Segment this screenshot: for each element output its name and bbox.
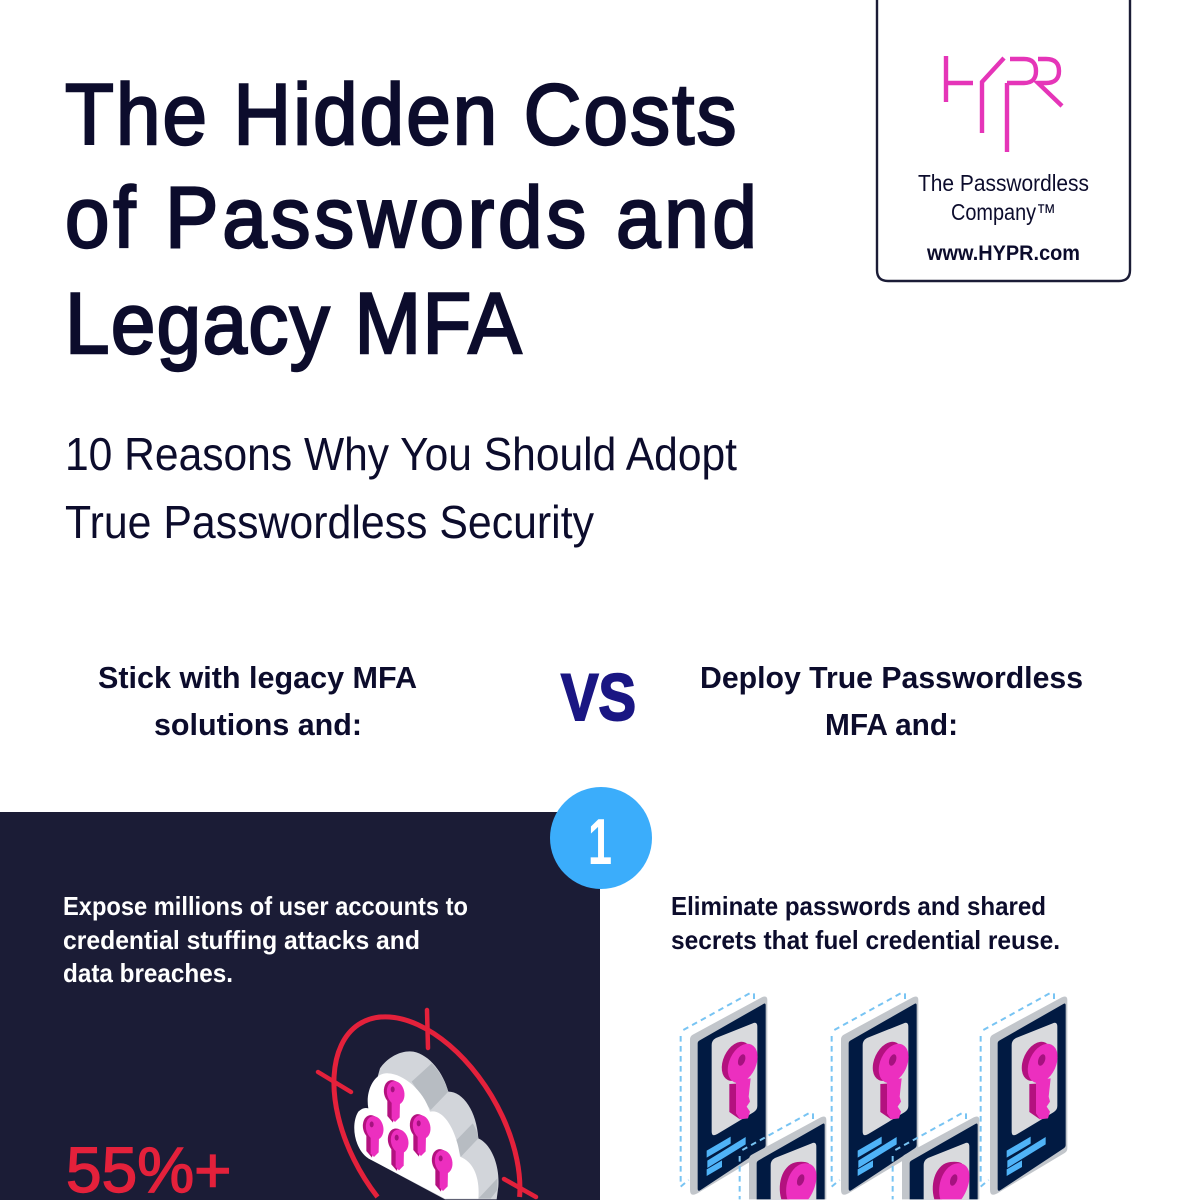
subtitle	[65, 428, 737, 548]
panel text: Expose millions of user accounts to	[63, 891, 468, 921]
panel text	[63, 891, 468, 988]
tagline: The Passwordless	[918, 170, 1089, 196]
panel: legacy dark	[0, 812, 600, 1200]
tagline: Company™	[951, 199, 1056, 225]
heading: passwordless MFA: MFA and:	[825, 707, 958, 742]
icon: cloud of keys	[354, 1051, 499, 1199]
tagline	[918, 170, 1089, 265]
title: The Hidden Costs	[65, 66, 736, 163]
right panel text: Eliminate passwords and shared	[671, 891, 1046, 921]
logo card	[876, 0, 1132, 282]
icon: HYPR logo	[946, 56, 1062, 152]
subtitle: True Passwordless Security	[65, 496, 594, 548]
heading: passwordless MFA: Deploy True Passwordless	[700, 660, 1083, 695]
title	[65, 66, 757, 372]
heading: legacy MFA	[98, 660, 417, 742]
title: of Passwords and	[65, 169, 757, 266]
number badge	[550, 787, 652, 889]
panel text: data breaches.	[63, 958, 233, 988]
subtitle: 10 Reasons Why You Should Adopt	[65, 428, 737, 480]
title: Legacy MFA	[65, 275, 522, 372]
VS label: VS	[561, 660, 636, 734]
panel text: credential stuffing attacks and	[63, 925, 420, 955]
right panel text: secrets that fuel credential reuse.	[671, 925, 1060, 955]
tagline: www.HYPR.com	[926, 242, 1080, 265]
heading: legacy MFA: Stick with legacy MFA	[98, 660, 417, 695]
icon: target ring	[318, 1010, 536, 1197]
number badge: 1	[588, 805, 612, 878]
icon: phones with keys	[680, 992, 1068, 1200]
right panel text	[671, 891, 1060, 955]
heading: passwordless MFA	[700, 660, 1083, 742]
heading: legacy MFA: solutions and:	[154, 707, 362, 742]
